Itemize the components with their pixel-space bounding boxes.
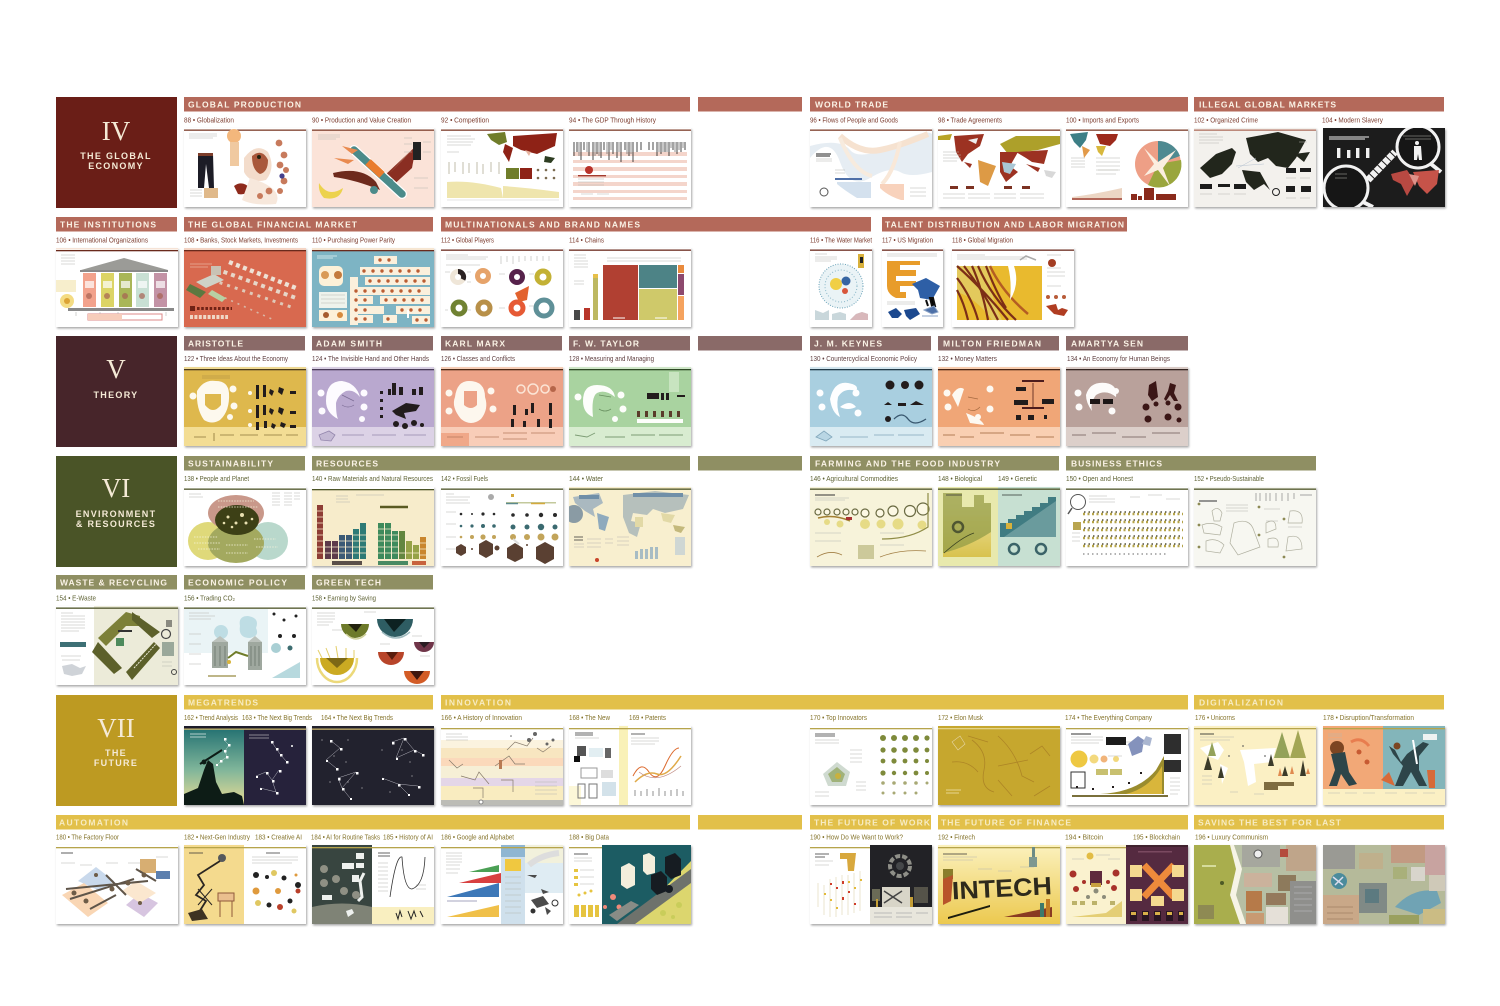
heading: Talent Distribution and Labor Migration bbox=[882, 217, 1127, 232]
thumbnail: 122 Aristotle bbox=[184, 367, 306, 446]
page labels, section VII: 194 • Bitcoin bbox=[1065, 832, 1103, 842]
page labels, section VII: 162 • Trend Analysis bbox=[184, 713, 238, 722]
heading: Sustainability: SUSTAINABILITY bbox=[188, 458, 273, 468]
section block: VII The Future bbox=[56, 695, 177, 806]
thumbnail: 162 163 Trend Analysis bbox=[184, 726, 306, 805]
section block: IV The Global Economy: THE GLOBAL bbox=[80, 151, 152, 161]
page labels, section VII: 188 • Big Data bbox=[569, 832, 610, 842]
thumbnail: 178 Disruption / Transformation bbox=[1323, 726, 1445, 805]
page labels, section IV: 104 • Modern Slavery bbox=[1322, 116, 1383, 124]
page labels, section IV: 114 • Chains bbox=[569, 236, 604, 244]
heading: Amartya Sen bbox=[1066, 336, 1188, 350]
thumbnail: 116 The Water Market bbox=[810, 248, 872, 327]
page labels, section V: 126 • Classes and Conflicts bbox=[441, 354, 515, 363]
thumbnail: 144 Water bbox=[565, 487, 691, 566]
section block: VI Environment & Resources: & RESOURCES bbox=[76, 519, 156, 529]
thumbnail: 100 Imports and Exports bbox=[1066, 128, 1188, 207]
thumbnail: 182 183 Next-Gen Industry and Creative AI bbox=[184, 845, 306, 924]
heading: Green Tech bbox=[312, 575, 433, 590]
page labels, section VI: 149 • Genetic bbox=[998, 474, 1037, 483]
heading: Resources bbox=[312, 456, 690, 470]
heading: The Global Financial Market: THE GLOBAL FINANCIAL MARKET bbox=[188, 220, 358, 230]
thumbnail: 148 149 Biological and Genetic bbox=[938, 487, 1060, 566]
heading: Business Ethics: BUSINESS ETHICS bbox=[1071, 458, 1162, 468]
thumbnail: 152 Pseudo-Sustainable bbox=[1194, 487, 1316, 566]
heading: World Trade bbox=[810, 97, 1188, 112]
page labels, section IV: 100 • Imports and Exports bbox=[1066, 116, 1139, 124]
page labels, section IV: 90 • Production and Value Creation bbox=[312, 116, 411, 124]
heading: Automation bbox=[56, 815, 690, 830]
heading: Illegal Global Markets bbox=[1194, 97, 1444, 112]
heading: J. M. Keynes: J. M. KEYNES bbox=[814, 338, 882, 348]
page labels, section VII: 183 • Creative AI bbox=[255, 832, 302, 842]
heading: Green Tech: GREEN TECH bbox=[316, 578, 381, 588]
thumbnail: 94 The GDP Through History bbox=[569, 128, 691, 207]
heading: The Future of Work bbox=[810, 815, 931, 830]
heading: The Global Financial Market bbox=[184, 217, 433, 232]
page labels, section VII: 169 • Patents bbox=[629, 713, 666, 722]
page labels, section VII: 190 • How Do We Want to Work? bbox=[810, 832, 903, 842]
heading: Sustainability bbox=[184, 456, 305, 470]
heading: Economic Policy bbox=[184, 575, 305, 590]
heading: Adam Smith: ADAM SMITH bbox=[316, 338, 382, 348]
heading bar: spacer bbox=[698, 336, 802, 350]
thumbnail: 124 Adam Smith bbox=[312, 367, 434, 446]
page labels, section VII: 185 • History of AI bbox=[383, 832, 433, 842]
thumbnail: 196 Luxury Communism left bbox=[1194, 845, 1316, 924]
heading: Resources: RESOURCES bbox=[316, 458, 378, 468]
page labels, section VII: 174 • The Everything Company bbox=[1065, 713, 1152, 722]
heading: Aristotle: ARISTOTLE bbox=[188, 338, 243, 348]
thumbnail: 146 Agricultural Commodities bbox=[810, 487, 932, 566]
thumbnail: 174 The Everything Company bbox=[1066, 726, 1188, 805]
page labels, section IV: 112 • Global Players bbox=[441, 236, 494, 244]
thumbnail: 140 Raw Materials and Natural Resources bbox=[312, 487, 434, 566]
thumbnail: 172 Elon Musk bbox=[938, 726, 1060, 805]
page labels, section IV: 106 • International Organizations bbox=[56, 236, 148, 244]
page labels, section IV: 117 • US Migration bbox=[882, 236, 933, 244]
heading: Digitalization: DIGITALIZATION bbox=[1199, 698, 1283, 708]
heading bar: spacer bbox=[698, 97, 802, 112]
thumbnail: 104 Modern Slavery bbox=[1323, 126, 1445, 210]
page labels, section VII: 182 • Next-Gen Industry bbox=[184, 832, 250, 842]
heading: Milton Friedman bbox=[938, 336, 1059, 350]
section block: IV The Global Economy: ECONOMY bbox=[88, 161, 144, 171]
heading: Farming and the Food Industry bbox=[810, 456, 1059, 470]
page labels, section VI: 140 • Raw Materials and Natural Resources bbox=[312, 474, 433, 483]
thumbnail: 156 Trading CO2 bbox=[184, 606, 306, 685]
thumbnail: 90 Production and Value Creation bbox=[312, 128, 434, 207]
page labels, section IV: 96 • Flows of People and Goods bbox=[810, 116, 898, 124]
thumbnail: 130 J. M. Keynes bbox=[810, 367, 932, 446]
section block: IV The Global Economy bbox=[56, 97, 177, 208]
heading: Milton Friedman: MILTON FRIEDMAN bbox=[943, 338, 1041, 348]
heading: Adam Smith bbox=[312, 336, 433, 350]
page labels, section IV: 92 • Competition bbox=[441, 116, 489, 124]
page labels, section IV: 94 • The GDP Through History bbox=[569, 116, 656, 124]
thumbnail: 96 Flows of People and Goods bbox=[810, 128, 933, 207]
page labels, section VI: 150 • Open and Honest bbox=[1066, 474, 1134, 483]
heading bar: spacer bbox=[698, 815, 802, 830]
page labels, section VI: 146 • Agricultural Commodities bbox=[810, 474, 898, 483]
page labels, section VII: 172 • Elon Musk bbox=[938, 713, 983, 722]
page labels, section IV: 98 • Trade Agreements bbox=[938, 116, 1002, 124]
thumbnail: 132 Milton Friedman bbox=[938, 367, 1060, 446]
page labels, section VI bbox=[56, 474, 1264, 602]
thumbnail: 186 Google and Alphabet bbox=[441, 845, 563, 924]
page labels, section VII: 168 • The New bbox=[569, 713, 610, 722]
thumbnail: 138 People and Planet bbox=[184, 487, 306, 566]
heading: Global Production bbox=[184, 97, 690, 112]
section block: VI Environment & Resources: VI bbox=[102, 473, 130, 503]
thumbnail: 164 The Next Big Trends bbox=[312, 726, 434, 805]
heading: Megatrends bbox=[184, 695, 433, 710]
page labels, section VI: 142 • Fossil Fuels bbox=[441, 474, 488, 483]
page labels, section IV: 116 • The Water Market bbox=[810, 236, 873, 244]
heading: Automation: AUTOMATION bbox=[59, 818, 128, 828]
heading: Aristotle bbox=[184, 336, 305, 350]
page labels, section V bbox=[184, 354, 1170, 363]
page labels, section IV: 118 • Global Migration bbox=[952, 236, 1013, 244]
heading bar: spacer bbox=[698, 456, 802, 470]
section VII: The Future bbox=[56, 695, 1445, 924]
thumbnail: 142 Fossil Fuels bbox=[441, 487, 563, 566]
section block: V Theory bbox=[56, 336, 177, 447]
page labels, section V: 132 • Money Matters bbox=[938, 354, 997, 363]
page labels, section VII: 170 • Top Innovators bbox=[810, 713, 867, 722]
page labels, section VII bbox=[56, 713, 1414, 842]
heading: Karl Marx bbox=[441, 336, 562, 350]
page labels, section IV bbox=[56, 116, 1383, 244]
section block: V Theory: V bbox=[106, 354, 126, 384]
heading: Talent Distribution and Labor Migration: TALENT DISTRIBUTION AND LABOR MIGRATION bbox=[885, 220, 1124, 230]
thumbnail: 170 Top Innovators bbox=[810, 726, 932, 805]
page labels, section VII: 186 • Google and Alphabet bbox=[441, 832, 515, 842]
page labels, section V: 128 • Measuring and Managing bbox=[569, 354, 654, 363]
thumbnail: 196 Luxury Communism right bbox=[1323, 845, 1445, 924]
heading: Innovation: INNOVATION bbox=[445, 698, 511, 708]
page labels, section V: 122 • Three Ideas About the Economy bbox=[184, 354, 288, 363]
page labels, section VI: 152 • Pseudo-Sustainable bbox=[1194, 474, 1264, 483]
page labels, section IV: 88 • Globalization bbox=[184, 116, 234, 124]
thumbnail: 128 F. W. Taylor bbox=[569, 367, 691, 446]
heading: Multinationals and Brand Names: MULTINATIONALS AND BRAND NAMES bbox=[445, 220, 640, 230]
heading: F. W. Taylor: F. W. TAYLOR bbox=[573, 338, 639, 348]
section block: VII The Future: VII bbox=[97, 713, 135, 743]
thumbnail: 154 E-Waste bbox=[56, 606, 178, 685]
page labels, section VI: 156 • Trading CO₂ bbox=[184, 594, 235, 602]
heading: The Institutions: THE INSTITUTIONS bbox=[60, 220, 156, 230]
page labels, section VII: 176 • Unicorns bbox=[1195, 713, 1235, 722]
page labels, section IV: 102 • Organized Crime bbox=[1194, 116, 1258, 124]
thumbnail: 192 Fintech bbox=[938, 845, 1060, 924]
thumbnail: 194 195 Bitcoin and Blockchain bbox=[1066, 845, 1188, 924]
heading: The Institutions bbox=[56, 217, 177, 232]
page labels, section VII: 192 • Fintech bbox=[938, 832, 975, 842]
section VI: Environment & Resources bbox=[56, 456, 1316, 685]
thumbnail: 126 Karl Marx bbox=[441, 367, 563, 446]
heading: The Future of Finance bbox=[938, 815, 1188, 830]
section IV: The Global Economy bbox=[56, 97, 1445, 327]
section block: IV The Global Economy: IV bbox=[102, 116, 131, 146]
heading: Amartya Sen: AMARTYA SEN bbox=[1071, 338, 1143, 348]
thumbnail: 88 Globalization bbox=[184, 128, 306, 207]
heading: Multinationals and Brand Names bbox=[441, 217, 871, 232]
heading: Illegal Global Markets: ILLEGAL GLOBAL MARKETS bbox=[1199, 100, 1336, 110]
page labels, section VII: 164 • The Next Big Trends bbox=[321, 713, 393, 722]
heading: Saving the Best for Last: SAVING THE BEST FOR LAST bbox=[1198, 818, 1342, 828]
thumbnail: 108 Banks, Stock Markets, Investments bbox=[184, 248, 306, 327]
thumbnail: 112 Global Players bbox=[441, 248, 563, 327]
thumbnail: 110 Purchasing Power Parity bbox=[312, 248, 434, 327]
page labels, section IV: 110 • Purchasing Power Parity bbox=[312, 236, 395, 244]
page labels, section VII: 178 • Disruption/Transformation bbox=[1323, 713, 1414, 722]
thumbnail: 168 169 The New and Patents bbox=[569, 726, 691, 805]
heading: Saving the Best for Last bbox=[1194, 815, 1444, 830]
page labels, section V: 134 • An Economy for Human Beings bbox=[1067, 354, 1170, 363]
heading: Business Ethics bbox=[1066, 456, 1316, 470]
section block: VI Environment & Resources bbox=[56, 456, 177, 567]
section V: Theory bbox=[56, 336, 1188, 447]
thumbnail: 184 185 AI for Routine Tasks and History of AI bbox=[312, 845, 434, 924]
page labels, section VI: 144 • Water bbox=[569, 474, 603, 483]
heading: Global Production: GLOBAL PRODUCTION bbox=[188, 100, 301, 110]
page labels, section VII: 196 • Luxury Communism bbox=[1195, 832, 1268, 842]
heading: J. M. Keynes bbox=[810, 336, 931, 350]
page labels, section IV: 108 • Banks, Stock Markets, Investments bbox=[184, 236, 298, 244]
page labels, section VII: 166 • A History of Innovation bbox=[441, 713, 522, 722]
heading: Innovation bbox=[441, 695, 1188, 710]
page labels, section VII: 163 • The Next Big Trends bbox=[242, 713, 312, 722]
page labels, section V: 124 • The Invisible Hand and Other Hands bbox=[312, 354, 429, 363]
heading: F. W. Taylor bbox=[569, 336, 690, 350]
heading: Digitalization bbox=[1194, 695, 1444, 710]
page labels, section VI: 138 • People and Planet bbox=[184, 474, 250, 483]
section block: VII The Future: FUTURE bbox=[94, 758, 138, 768]
heading: Karl Marx: KARL MARX bbox=[445, 338, 505, 348]
heading: Megatrends: MEGATRENDS bbox=[188, 698, 258, 708]
thumbnail: 114 Chains bbox=[569, 248, 691, 327]
thumbnail: 92 Competition bbox=[441, 128, 563, 207]
page labels, section VI: 158 • Earning by Saving bbox=[312, 594, 376, 602]
thumbnail: 158 Earning by Saving bbox=[312, 606, 434, 685]
thumbnail: 102 Organized Crime bbox=[1194, 128, 1316, 207]
heading: World Trade: WORLD TRADE bbox=[815, 100, 888, 110]
section block: VII The Future: THE bbox=[105, 748, 127, 758]
thumbnail: 98 Trade Agreements bbox=[938, 128, 1060, 207]
page labels, section VII: 184 • AI for Routine Tasks bbox=[311, 832, 380, 842]
page labels, section VII: 195 • Blockchain bbox=[1133, 832, 1180, 842]
heading: Farming and the Food Industry: FARMING AND THE FOOD INDUSTRY bbox=[815, 458, 1000, 468]
thumbnail: 176 Unicorns bbox=[1194, 726, 1316, 805]
thumbnail: 190 How Do We Want to Work bbox=[810, 845, 932, 924]
heading: Waste & Recycling bbox=[56, 575, 177, 590]
page labels, section VI: 154 • E-Waste bbox=[56, 594, 96, 602]
page labels, section VII: 180 • The Factory Floor bbox=[56, 832, 119, 842]
section block: V Theory: THEORY bbox=[94, 390, 138, 400]
thumbnail: 117 US Migration bbox=[882, 248, 943, 327]
section block: VI Environment & Resources: ENVIRONMENT bbox=[76, 509, 156, 519]
thumbnail: 118 Global Migration bbox=[952, 248, 1074, 327]
thumbnail: 106 International Organizations bbox=[56, 248, 178, 327]
thumbnail: 134 Amartya Sen bbox=[1066, 367, 1188, 446]
page labels, section VI: 148 • Biological bbox=[938, 474, 982, 483]
thumbnail: 166 A History of Innovation bbox=[441, 726, 563, 805]
heading: Waste & Recycling: WASTE & RECYCLING bbox=[60, 578, 167, 588]
thumbnail: 188 Big Data bbox=[569, 845, 691, 924]
heading: The Future of Work: THE FUTURE OF WORK bbox=[814, 818, 931, 828]
page labels, section V: 130 • Countercyclical Economic Policy bbox=[810, 354, 917, 363]
thumbnail: 180 The Factory Floor bbox=[56, 845, 178, 924]
thumbnail: 150 Open and Honest bbox=[1066, 487, 1188, 566]
heading: The Future of Finance: THE FUTURE OF FINANCE bbox=[941, 818, 1071, 828]
thumbnail: 192 Fintech: INTECH bbox=[951, 872, 1053, 905]
heading: Economic Policy: ECONOMIC POLICY bbox=[188, 578, 287, 588]
